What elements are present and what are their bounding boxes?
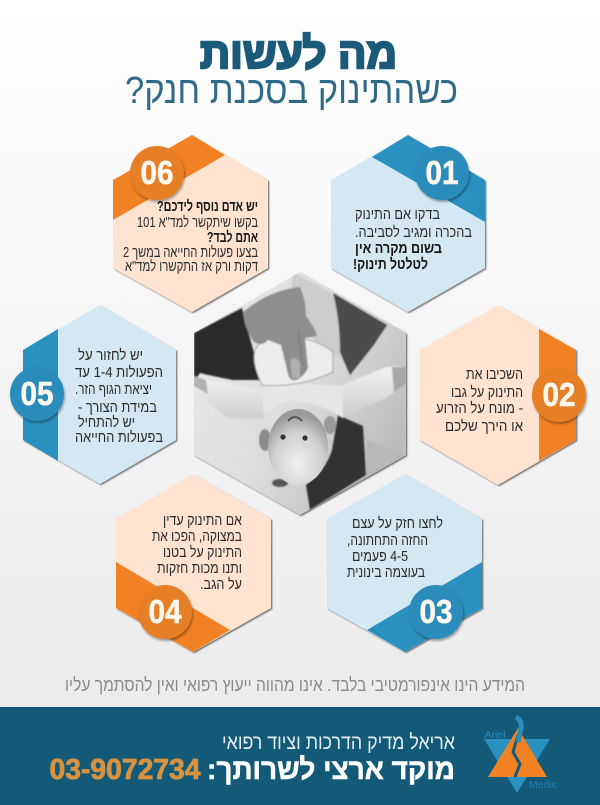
step text 06 <box>123 198 258 275</box>
background right lower <box>365 441 402 478</box>
step number 06: 06 <box>140 154 174 191</box>
band <box>113 135 225 220</box>
panel: step 05 <box>10 305 176 484</box>
central photo: infant chest compressions <box>190 268 410 518</box>
step text 04: על הגב. <box>200 576 242 593</box>
step text 05: בפעולות החייאה <box>75 429 163 446</box>
panel: step 01 <box>331 135 485 312</box>
step text 05: הפעולות 1-4 עד <box>75 364 163 381</box>
rescuer torso <box>290 272 340 358</box>
step text 06: בקשו שיתקשר למד"א 101 <box>137 214 258 231</box>
step text 06: בצעו פעולות החייאה במשך 2 <box>123 244 258 261</box>
title line 2: כשהתינוק בסכנת חנק? <box>125 70 458 112</box>
step text 04: ותנו מכות חזקות <box>157 560 242 577</box>
step number 04: 04 <box>148 593 182 630</box>
baby left arm <box>206 380 264 418</box>
step number 02: 02 <box>542 376 576 413</box>
disclaimer: המידע הינו אינפורמטיבי בלבד. אינו מהווה ייעוץ רפואי ואין להסתמך עליו <box>65 674 525 695</box>
step text 04: במצוקה, הפכו את <box>152 528 242 545</box>
panel: step 03 <box>327 474 482 652</box>
step text 05: יציאת הגוף הזר. <box>75 381 152 398</box>
step text 03: החזה התחתונה, <box>347 532 428 549</box>
band <box>23 329 58 461</box>
panel: step 04 <box>116 474 271 652</box>
footer bar <box>0 707 600 805</box>
step text 01 <box>353 206 472 273</box>
step number 04 <box>138 585 192 639</box>
step text 02 <box>436 366 524 435</box>
baby collar <box>254 330 333 385</box>
step number 05: 05 <box>20 375 54 412</box>
step text 06: אתם לבד? <box>207 229 258 246</box>
step text 01: לטלטל תינוק! <box>353 256 428 273</box>
logo: Ariel Medic star: Medic <box>529 779 557 791</box>
baby torso <box>263 384 343 418</box>
step text 02: או הירך שלכם <box>445 418 524 435</box>
step text 04: אם התינוק עדין <box>163 512 242 529</box>
step text 03: לחצו חזק על עצם <box>352 515 443 532</box>
step text 04 <box>152 512 242 593</box>
step number 03: 03 <box>420 593 452 630</box>
step number 01: 01 <box>426 154 458 191</box>
hand <box>243 287 317 380</box>
step text 03 <box>347 515 443 581</box>
logo: Ariel Medic star <box>484 717 557 793</box>
step text 06: יש אדם נוסף לידכם? <box>157 198 258 215</box>
step text 05: יש להתחיל <box>78 414 135 431</box>
band <box>367 562 482 652</box>
step text 01: בהכרה ומגיב לסביבה. <box>355 224 472 241</box>
footer phone number: 03-9072734 <box>50 754 200 786</box>
step text 06: דקות ורק אז התקשרו למד"א <box>125 258 258 275</box>
footer company name: אריאל מדיק הדרכות וציוד רפואי <box>222 731 455 754</box>
step text 04: התינוק על בטנו <box>163 544 242 561</box>
step number 02 <box>532 368 586 422</box>
step number 03 <box>409 585 463 639</box>
title <box>125 30 458 112</box>
step text 03: בעוצמה בינונית <box>347 564 425 581</box>
panel: step 06 <box>113 135 268 312</box>
step number 05 <box>10 367 64 421</box>
step text 01: בדקו אם התינוק <box>355 206 440 223</box>
rescuer dark sleeve left <box>194 308 262 382</box>
step number 01 <box>415 146 469 200</box>
band <box>116 562 230 652</box>
rescuer dark clothing below <box>306 415 366 510</box>
step text 03: 4-5 פעמים <box>352 548 408 565</box>
step text 05 <box>75 347 163 446</box>
title line 1: מה לעשות <box>200 30 397 78</box>
panel: step 02 <box>420 305 586 485</box>
baby right arm <box>342 366 402 408</box>
footer service line: מוקד ארצי לשרותך: <box>207 754 455 786</box>
step number 06 <box>130 146 184 200</box>
step text 05: במידת הצורך - <box>78 399 157 416</box>
step text 05: יש לחזור על <box>78 347 143 364</box>
baby head <box>268 409 328 485</box>
band <box>372 135 485 222</box>
step text 01: בשום מקרה אין <box>355 240 442 257</box>
logo: Ariel Medic star: Ariel <box>484 729 506 741</box>
step text 02: - מונח על הזרוע <box>436 400 523 417</box>
step text 02: התינוק על גבו <box>451 384 523 401</box>
band <box>539 329 576 461</box>
step text 02: השכיבו את <box>466 366 523 383</box>
rescuer dark clothing right <box>333 293 387 375</box>
